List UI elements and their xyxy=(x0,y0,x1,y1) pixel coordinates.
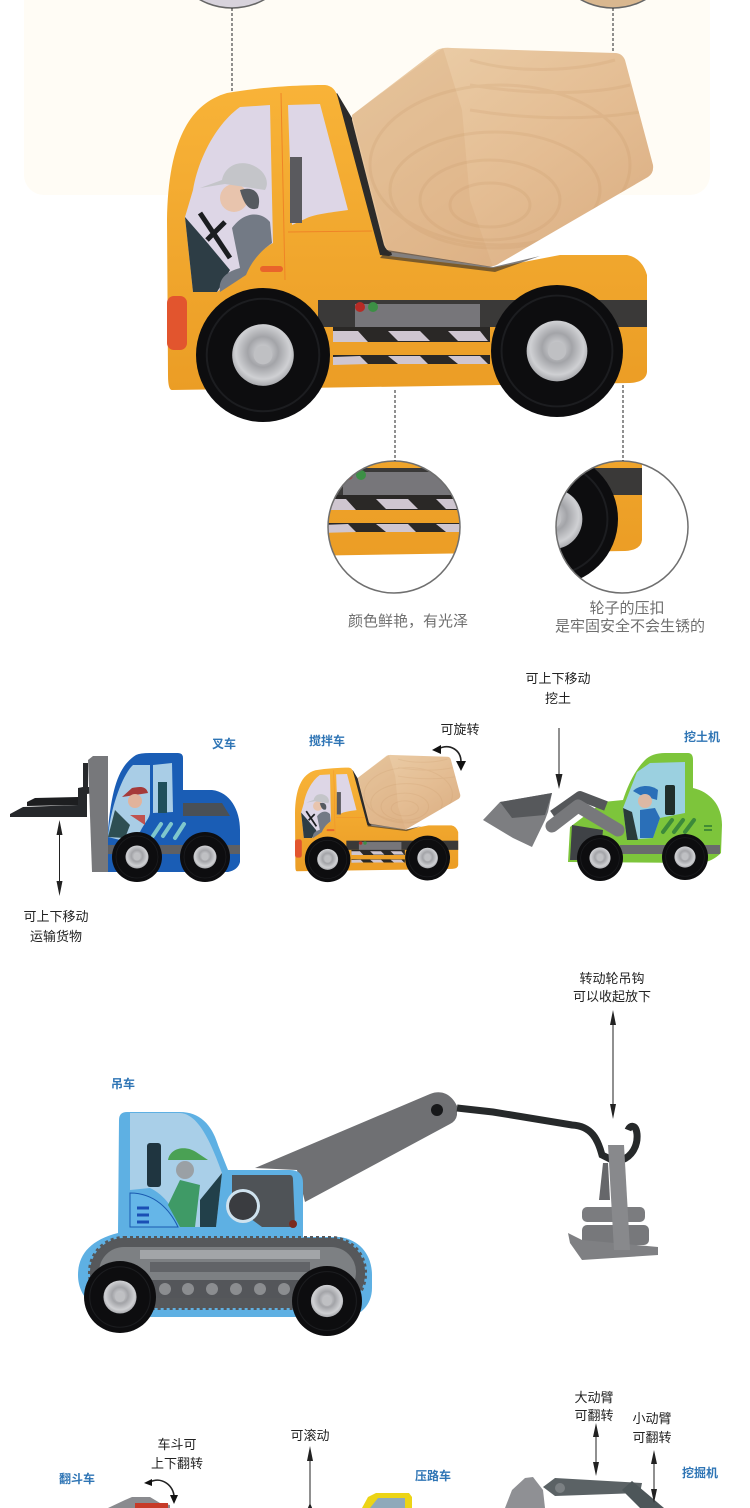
note: roller: 可滚动 xyxy=(290,1428,330,1443)
note: loader xyxy=(525,671,591,706)
detail circle: top right xyxy=(547,0,679,52)
main mixer truck xyxy=(167,48,653,422)
note: crane hook xyxy=(573,971,651,1004)
arrow: rotate xyxy=(432,745,466,771)
label: road roller: 压路车 xyxy=(415,1468,451,1483)
caption: wheel clamp: 是牢固安全不会生锈的 xyxy=(555,617,705,635)
note: small arm: 小动臂 xyxy=(632,1411,672,1426)
note: forklift: 可上下移动 xyxy=(23,909,89,924)
panel: cream background xyxy=(24,0,710,195)
detail circle: body colour xyxy=(327,390,461,594)
label: crane: 吊车 xyxy=(111,1076,135,1091)
label: forklift: 叉车 xyxy=(212,736,236,751)
arrow: big arm xyxy=(593,1423,599,1476)
label: loader: 挖土机 xyxy=(684,729,720,744)
arrow: small arm xyxy=(651,1450,657,1503)
note: big arm: 可翻转 xyxy=(574,1408,614,1423)
caption: colour: 颜色鲜艳，有光泽 xyxy=(348,613,468,630)
detail circle: wheel clamp xyxy=(555,385,689,594)
arrow: roller xyxy=(307,1446,313,1508)
note: forklift: 运输货物 xyxy=(30,929,82,944)
note: crane hook: 转动轮吊钩 xyxy=(579,971,645,986)
note: dump truck: 上下翻转 xyxy=(151,1456,203,1471)
forklift xyxy=(10,753,240,882)
dump truck top xyxy=(108,1497,170,1508)
note: dump truck: 车斗可 xyxy=(157,1437,197,1452)
label: dump truck: 翻斗车 xyxy=(59,1471,95,1486)
note: rotate: 可旋转 xyxy=(440,722,480,737)
loader xyxy=(483,753,722,881)
note: forklift xyxy=(23,909,89,944)
excavator top xyxy=(505,1477,664,1508)
caption: wheel clamp: 轮子的压扣 xyxy=(589,600,665,617)
small mixer truck xyxy=(295,755,460,882)
detail circle: top left xyxy=(166,0,298,92)
crane xyxy=(78,1092,658,1336)
arrow: dump truck tip xyxy=(144,1479,178,1504)
caption: wheel clamp xyxy=(555,600,705,635)
note: big arm: 大动臂 xyxy=(574,1390,614,1405)
label: mixer: 搅拌车 xyxy=(309,733,345,748)
note: loader: 可上下移动 xyxy=(525,671,591,686)
note: small arm: 可翻转 xyxy=(632,1430,672,1445)
note: big arm xyxy=(574,1390,614,1423)
arrow: loader lift xyxy=(556,728,562,789)
arrow: forklift lift xyxy=(56,820,62,896)
arrow: crane hook xyxy=(610,1010,616,1119)
road roller top xyxy=(362,1493,412,1508)
note: loader: 挖土 xyxy=(545,691,571,706)
note: crane hook: 可以收起放下 xyxy=(573,989,651,1004)
note: small arm xyxy=(632,1411,672,1445)
note: dump truck xyxy=(151,1437,203,1471)
label: excavator: 挖掘机 xyxy=(682,1465,718,1480)
